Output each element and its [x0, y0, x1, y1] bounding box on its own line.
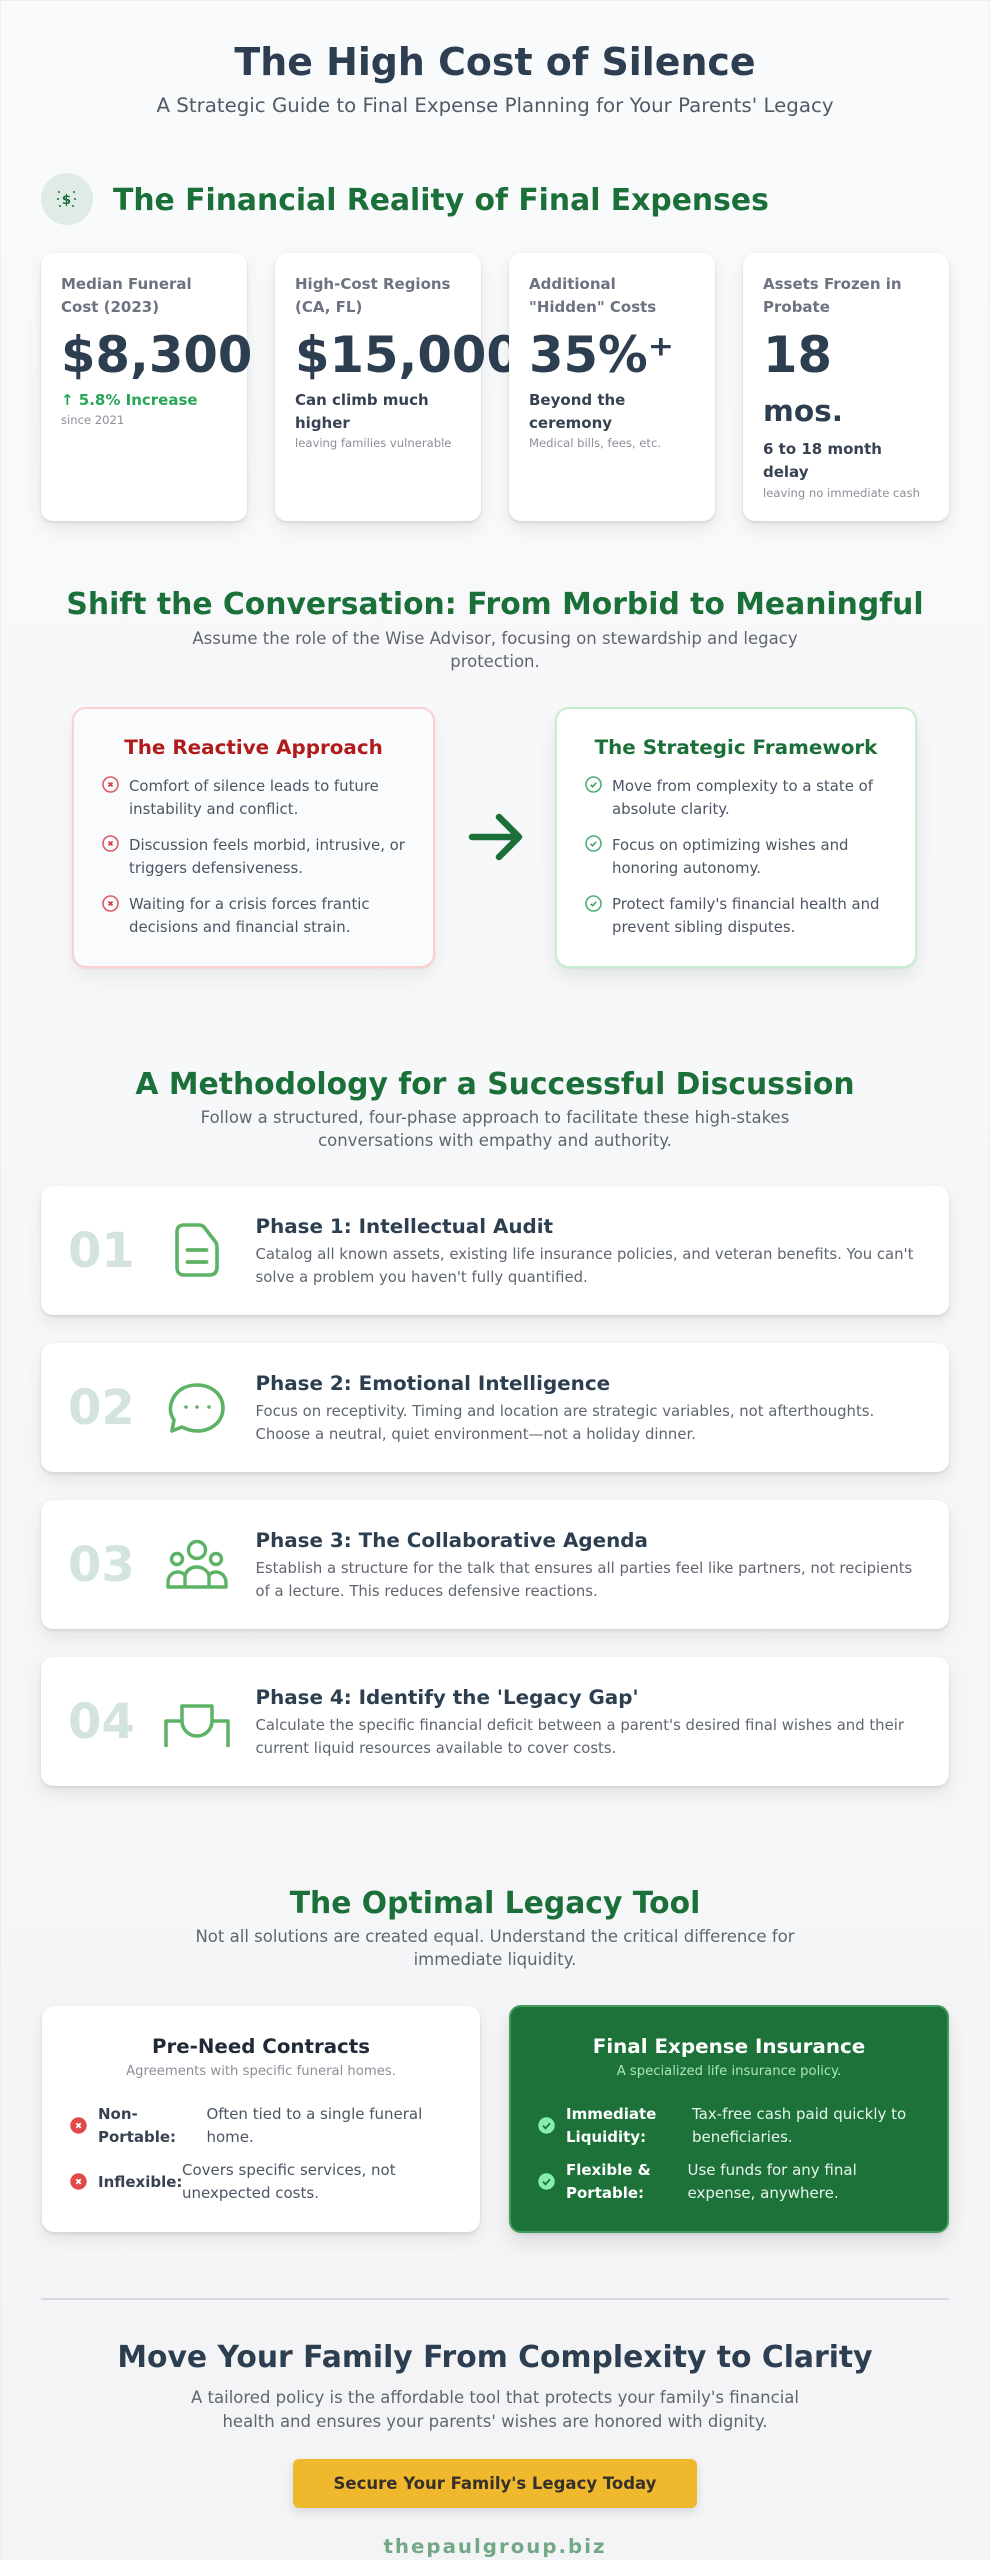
panel heading: The Strategic Framework — [595, 736, 877, 759]
label — [566, 2103, 656, 2149]
section 3 intro — [201, 1108, 789, 1150]
label: Median Funeral — [61, 275, 192, 293]
description: Covers specific services, not — [182, 2161, 396, 2179]
phase description: current liquid resources available to cover costs. — [256, 1738, 616, 1756]
label: Probate — [763, 298, 830, 316]
item text — [612, 836, 848, 876]
panel: strategic framework — [555, 707, 917, 968]
item text: Comfort of silence leads to future — [129, 777, 379, 795]
label: Portable: — [98, 2128, 176, 2146]
note: since 2021 — [61, 413, 124, 427]
label: Inflexible: — [98, 2173, 182, 2191]
label — [763, 275, 902, 316]
section 2 intro: Assume the role of the Wise Advisor, focusing on stewardship and legacy — [192, 629, 798, 648]
icon: check — [585, 895, 602, 912]
closing text: health and ensures your parents' wishes are honored with dignity. — [222, 2412, 768, 2430]
section 3 intro: conversations with empathy and authority. — [318, 1131, 672, 1150]
section 2 intro: protection. — [450, 652, 540, 671]
value: $8,300 — [61, 326, 252, 384]
section 2 intro — [192, 629, 798, 671]
arrow — [468, 814, 522, 860]
icon: document — [175, 1223, 219, 1277]
item text: triggers defensiveness. — [129, 858, 303, 876]
phase card 1 — [41, 1186, 949, 1315]
list item — [102, 776, 379, 818]
phase card 2 — [41, 1343, 949, 1472]
section 3 heading: A Methodology for a Successful Discussion — [135, 1066, 855, 1102]
phase card 3 — [41, 1500, 949, 1629]
description: expense, anywhere. — [688, 2184, 839, 2202]
item text — [612, 777, 874, 818]
detail — [295, 391, 429, 432]
icon: speech bubble — [168, 1383, 225, 1433]
icon: check badge — [538, 2117, 555, 2134]
phase description: Calculate the specific financial deficit between a parent's desired final wishes and their — [256, 1716, 904, 1734]
phase description — [256, 1716, 904, 1756]
detail: higher — [295, 414, 350, 432]
phase number: 01 — [68, 1223, 135, 1279]
list item — [585, 835, 848, 876]
item text: decisions and financial strain. — [129, 918, 350, 936]
detail: ceremony — [529, 414, 612, 432]
section 4 intro: immediate liquidity. — [414, 1950, 576, 1969]
icon: x — [102, 895, 119, 912]
icon: x badge — [70, 2117, 87, 2134]
phase description: Choose a neutral, quiet environment—not a holiday dinner. — [256, 1424, 696, 1442]
call to action button — [293, 2459, 697, 2508]
description: Often tied to a single funeral — [206, 2105, 422, 2123]
footer website: thepaulgroup.biz — [383, 2535, 607, 2558]
description — [206, 2103, 422, 2149]
label: "Hidden" Costs — [529, 298, 656, 316]
phase title: Phase 3: The Collaborative Agenda — [256, 1528, 648, 1552]
icon: x — [102, 776, 119, 793]
panel: reactive approach — [72, 707, 435, 968]
description: Tax-free cash paid quickly to — [692, 2105, 906, 2123]
icon: x — [102, 835, 119, 852]
comparison row — [511, 2152, 947, 2212]
section 2 heading: Shift the Conversation: From Morbid to Meaningful — [66, 586, 924, 622]
panel heading: Pre-Need Contracts — [152, 2035, 370, 2058]
panel: final expense insurance — [509, 2005, 949, 2233]
phase number: 03 — [68, 1537, 135, 1593]
label: Non- — [98, 2105, 138, 2123]
phase title: Phase 4: Identify the 'Legacy Gap' — [256, 1686, 639, 1708]
list item — [585, 894, 880, 936]
detail: Can climb much — [295, 391, 429, 409]
item text: Protect family's financial health and — [612, 894, 880, 912]
label — [529, 275, 656, 316]
description: Use funds for any final — [688, 2161, 857, 2179]
icon: dollar sign: $ — [62, 192, 71, 208]
subtitle: A Strategic Guide to Final Expense Planning for Your Parents' Legacy — [156, 94, 834, 117]
phase description — [256, 1558, 912, 1600]
description — [182, 2159, 396, 2205]
item text — [129, 777, 379, 818]
detail: 6 to 18 month — [763, 440, 882, 458]
label: High-Cost Regions — [295, 275, 450, 293]
label: (CA, FL) — [295, 298, 362, 316]
item text: prevent sibling disputes. — [612, 918, 795, 936]
stat card: high-cost regions — [275, 253, 481, 521]
label: Portable: — [566, 2184, 644, 2202]
stat card: hidden costs — [509, 253, 715, 521]
panel: pre-need contracts — [42, 2006, 480, 2232]
closing text — [0, 2386, 990, 2433]
detail: delay — [763, 463, 808, 481]
icon: check — [585, 776, 602, 793]
unit: mos. — [763, 394, 843, 428]
detail: Beyond the — [529, 391, 625, 409]
item text — [612, 894, 880, 936]
item text: Move from complexity to a state of — [612, 777, 873, 795]
description: home. — [206, 2128, 254, 2146]
label — [98, 2103, 176, 2149]
note: leaving families vulnerable — [295, 436, 451, 450]
item text — [129, 836, 405, 876]
phase description — [256, 1402, 874, 1442]
section 4 intro — [195, 1927, 795, 1969]
item text: absolute clarity. — [612, 800, 730, 818]
closing text: A tailored policy is the affordable tool that protects your family's financial — [191, 2388, 799, 2407]
stat card: median funeral cost — [41, 253, 247, 521]
icon: legacy gap — [164, 1704, 230, 1747]
comparison row — [42, 2152, 480, 2212]
change: ↑ 5.8% Increase — [61, 391, 198, 409]
description — [692, 2103, 906, 2149]
panel subheading: Agreements with specific funeral homes. — [126, 2064, 396, 2079]
comparison row — [511, 2096, 947, 2156]
icon: check — [585, 835, 602, 852]
detail — [763, 440, 882, 481]
phase description: Catalog all known assets, existing life insurance policies, and veteran benefits. You can't — [256, 1244, 913, 1262]
list item — [102, 835, 405, 876]
value: 18 — [763, 326, 832, 384]
phase description: Establish a structure for the talk that ensures all parties feel like partners, not recipients — [256, 1558, 912, 1576]
detail — [529, 391, 625, 432]
label: Liquidity: — [566, 2128, 646, 2146]
icon: x badge — [70, 2173, 87, 2190]
label — [566, 2159, 651, 2205]
stat card: probate — [743, 253, 949, 521]
comparison row — [70, 2105, 422, 2146]
closing heading: Move Your Family From Complexity to Clarity — [117, 2340, 873, 2374]
icon: check badge — [538, 2173, 555, 2190]
label: Flexible & — [566, 2161, 651, 2179]
section 4 intro: Not all solutions are created equal. Understand the critical difference for — [195, 1927, 795, 1946]
phase card 4 — [41, 1657, 949, 1786]
icon: group of people — [166, 1540, 228, 1589]
phase number: 02 — [68, 1380, 135, 1436]
label — [61, 275, 192, 316]
panel heading: The Reactive Approach — [124, 736, 383, 759]
phase title: Phase 1: Intellectual Audit — [256, 1214, 553, 1238]
phase description: Focus on receptivity. Timing and location are strategic variables, not afterthoughts. — [256, 1402, 874, 1420]
list item — [102, 894, 370, 936]
title: The High Cost of Silence — [234, 40, 756, 84]
section 3 intro: Follow a structured, four-phase approach to facilitate these high-stakes — [201, 1108, 789, 1127]
item text: honoring autonomy. — [612, 858, 761, 876]
item text — [129, 894, 370, 936]
label: Cost (2023) — [61, 298, 159, 316]
list item — [585, 776, 874, 818]
description — [688, 2159, 857, 2205]
phase title: Phase 2: Emotional Intelligence — [256, 1372, 610, 1394]
phase description: solve a problem you haven't fully quantified. — [256, 1268, 588, 1286]
phase description — [256, 1244, 914, 1286]
phase number: 04 — [68, 1694, 135, 1750]
item text: Discussion feels morbid, intrusive, or — [129, 836, 405, 854]
section 1: financial reality — [39, 173, 951, 529]
label: Immediate — [566, 2105, 656, 2123]
icon: dollar sign — [41, 173, 93, 225]
description: beneficiaries. — [692, 2128, 793, 2146]
label: Assets Frozen in — [763, 275, 902, 293]
panel subheading: A specialized life insurance policy. — [617, 2064, 841, 2079]
value: $15,000 — [295, 326, 521, 384]
note: leaving no immediate cash — [763, 486, 920, 500]
section heading: The Financial Reality of Final Expenses — [113, 182, 769, 218]
item text: instability and conflict. — [129, 800, 298, 818]
section 4 heading: The Optimal Legacy Tool — [290, 1886, 700, 1920]
item text: Waiting for a crisis forces frantic — [129, 894, 370, 912]
item text: Focus on optimizing wishes and — [612, 836, 848, 854]
panel heading: Final Expense Insurance — [593, 2035, 865, 2058]
label — [295, 275, 450, 316]
value: 35%⁺ — [529, 326, 674, 384]
note: Medical bills, fees, etc. — [529, 436, 661, 450]
phase description: of a lecture. This reduces defensive reactions. — [256, 1582, 598, 1600]
call to action button: Secure Your Family's Legacy Today — [334, 2474, 656, 2493]
label: Additional — [529, 275, 616, 293]
description: unexpected costs. — [182, 2184, 319, 2202]
